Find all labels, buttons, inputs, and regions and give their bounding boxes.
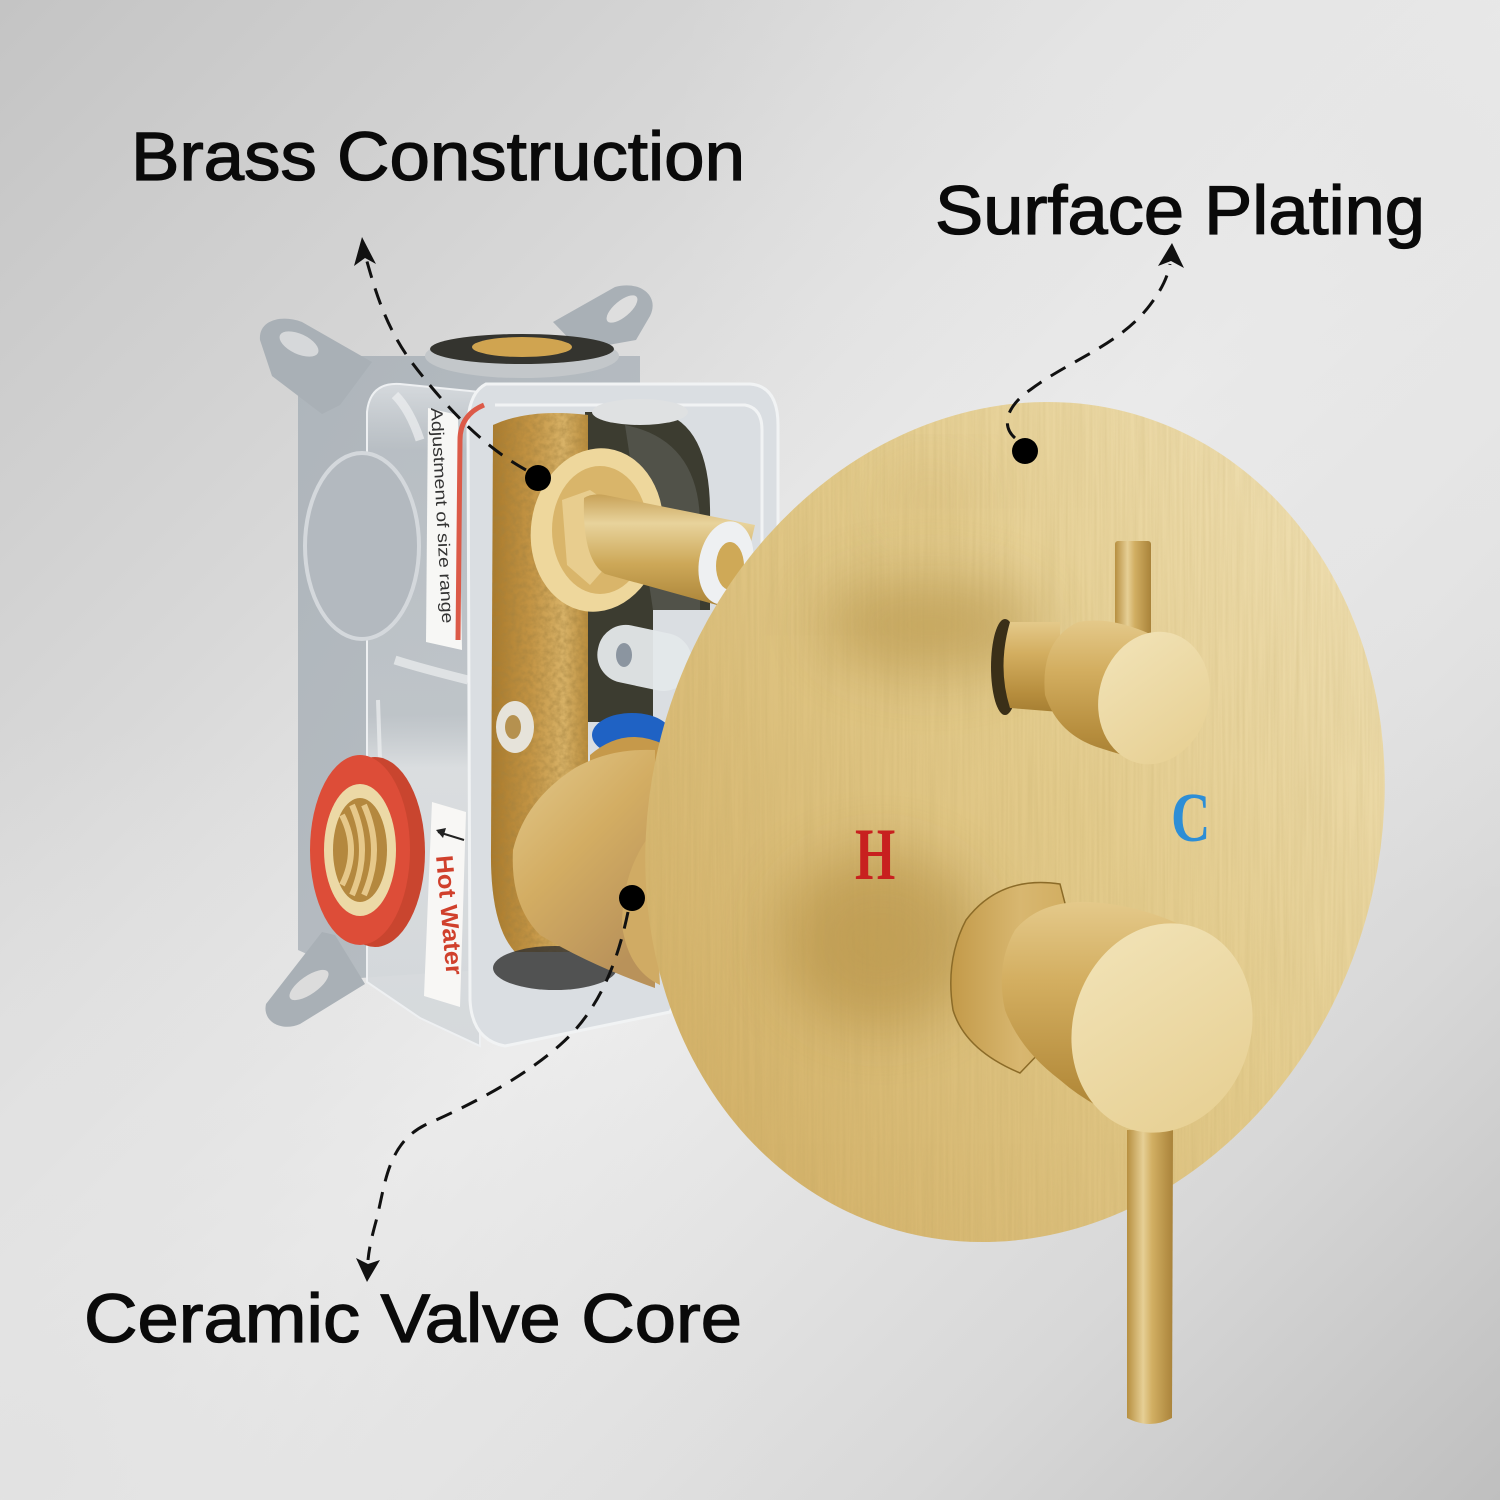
heading: Ceramic Valve Core: Ceramic Valve Core [84,1280,742,1357]
callout: surface plating arrow [1007,243,1184,464]
grey mounting plate with ears [260,285,653,1027]
brass body [488,405,593,955]
front frame of clear cover [468,384,778,1046]
mounting box with valve body [260,285,778,1046]
sticker: Adjustment of size range [426,405,484,650]
sticker: Hot Water: Hot Water [430,854,467,976]
upper brass fitting with collar and hex nut [520,440,760,620]
handle end cap [1046,901,1278,1155]
red hot-water port [310,755,425,947]
clear fittings [592,399,697,696]
knob body [1044,620,1155,762]
lower mixing handle [951,882,1278,1424]
sticker: Hot Water [424,802,467,1007]
upper lever [1115,541,1151,636]
top water port [425,334,619,378]
letter H: H [855,813,895,895]
blue seal [592,713,672,757]
sticker: Adjustment of size range: Adjustment of size range [427,407,456,624]
heading: Surface Plating: Surface Plating [935,172,1425,249]
clear cover side face [367,384,480,1046]
letter C: C [1171,779,1210,857]
large valve cylinder [513,750,655,988]
callout: brass construction arrow [354,237,551,491]
dark interior [585,412,710,722]
round trim plate [646,402,1385,1242]
rear collar [951,882,1090,1073]
knob end cap [1084,619,1224,777]
heading: Brass Construction: Brass Construction [131,118,745,195]
dark bottom seal [493,946,617,990]
callout: ceramic valve core arrow [356,885,645,1282]
upper diverter handle [991,541,1224,777]
handle shadows on plate [780,470,1040,1030]
screw lug [496,701,534,753]
lower lever [1127,1130,1173,1424]
handle body [1002,902,1210,1130]
stem [1004,622,1060,712]
blanking plug [305,453,419,639]
clear ribs on side face [378,395,468,760]
valve cone [622,832,660,985]
